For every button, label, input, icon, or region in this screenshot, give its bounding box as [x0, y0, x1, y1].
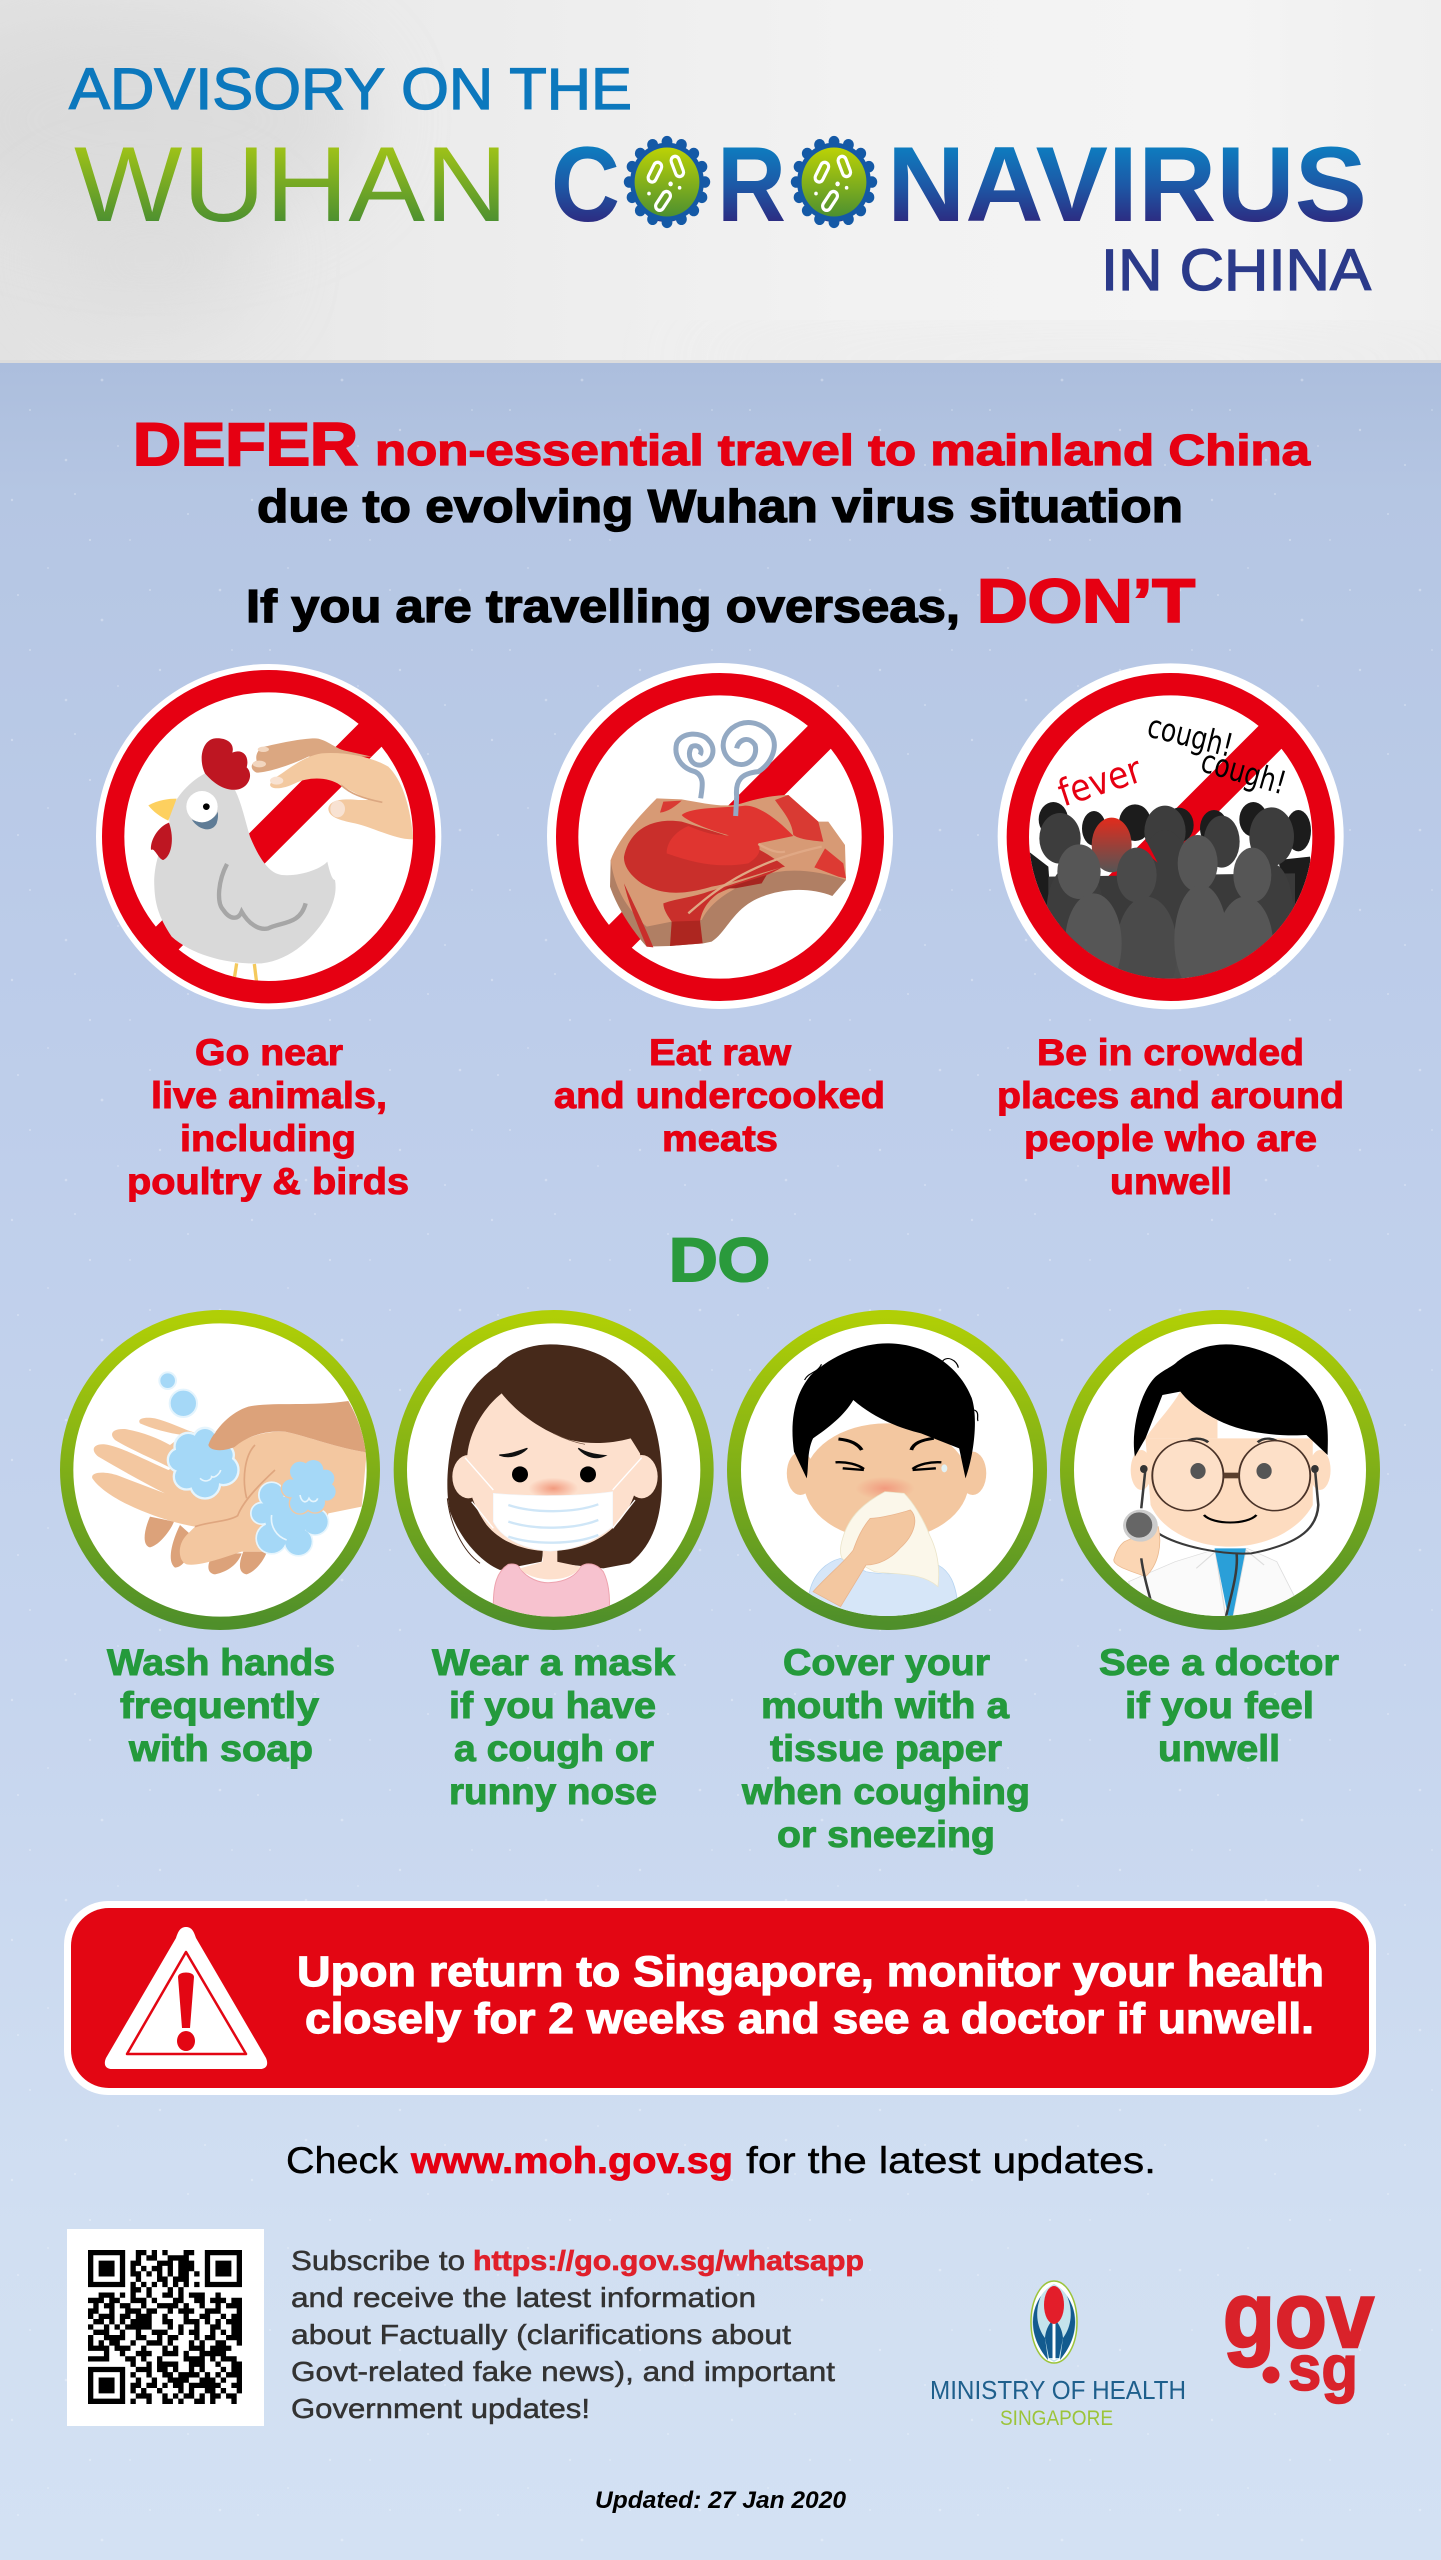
caption: cover your mouth: or sneezing	[777, 1814, 995, 1855]
text: subscribe	[291, 2245, 864, 2424]
caption: wear a mask: a cough or	[454, 1728, 654, 1769]
icon: virus one	[624, 136, 710, 228]
caption: wear a mask: Wear a mask	[432, 1642, 675, 1683]
logo: gov.sg: sg	[1288, 2332, 1358, 2404]
text: check website: Check	[286, 2140, 399, 2181]
caption: see a doctor: if you feel	[1125, 1685, 1314, 1726]
caption: raw meat: meats	[662, 1118, 778, 1159]
logo: gov.sg	[1223, 2262, 1374, 2404]
icon: moh emblem	[1031, 2281, 1077, 2363]
caption: raw meat	[554, 1032, 885, 1159]
caption: wear a mask	[432, 1642, 675, 1812]
icon: no crowded places: cough!	[1197, 742, 1291, 802]
caption: wear a mask: runny nose	[449, 1771, 657, 1812]
caption: crowded places: people who are	[1024, 1118, 1317, 1159]
callout text	[297, 1948, 1324, 2043]
text: check website: for the latest updates.	[746, 2140, 1156, 2181]
title: in china: IN CHINA	[1101, 238, 1371, 303]
heading: defer travel	[133, 411, 1311, 532]
text: subscribe: about Factually (clarifications about	[291, 2319, 791, 2350]
heading: don't	[246, 567, 1195, 635]
caption: crowded places: Be in crowded	[1037, 1032, 1304, 1073]
heading: don't: DON’T	[977, 567, 1195, 635]
text: check website	[286, 2140, 1156, 2181]
caption: raw meat: Eat raw	[649, 1032, 791, 1073]
caption: cover your mouth: when coughing	[741, 1771, 1030, 1812]
text: updated date: Updated: 27 Jan 2020	[595, 2487, 847, 2514]
title: coronavirus: R	[717, 124, 786, 244]
title: advisory on the: ADVISORY ON THE	[69, 57, 632, 122]
heading: don't: If you are travelling overseas,	[246, 580, 960, 632]
caption: live animals: including	[180, 1118, 356, 1159]
heading: defer travel: due to evolving Wuhan virus situation	[257, 480, 1183, 532]
caption: live animals: poultry & birds	[127, 1161, 409, 1202]
icon: see a doctor	[1067, 1317, 1373, 1625]
caption: live animals: Go near	[195, 1032, 343, 1073]
caption: cover your mouth: Cover your	[783, 1642, 990, 1683]
title: coronavirus: NAVIRUS	[887, 124, 1367, 244]
caption: wash hands: frequently	[120, 1685, 319, 1726]
icon: wash hands	[67, 1317, 373, 1623]
title: coronavirus: O	[632, 124, 700, 244]
icon: cover mouth	[734, 1317, 1040, 1625]
heading: do: DO	[669, 1226, 770, 1294]
caption: crowded places	[997, 1032, 1344, 1202]
text: subscribe: Subscribe to	[291, 2245, 465, 2276]
icon: no crowded places	[998, 663, 1344, 1009]
icon: no raw meat	[547, 663, 893, 1009]
callout text: Upon return to Singapore, monitor your health	[297, 1948, 1324, 1996]
caption: see a doctor	[1099, 1642, 1339, 1769]
caption: see a doctor: unwell	[1158, 1728, 1280, 1769]
logo: ministry of health: MINISTRY OF HEALTH	[930, 2375, 1186, 2405]
header panel	[0, 0, 1441, 380]
caption: cover your mouth: mouth with a	[761, 1685, 1009, 1726]
logo: gov.sg: gov	[1223, 2262, 1374, 2367]
icon: no live animals	[96, 664, 441, 1009]
icon: no crowded places: cough!	[1144, 707, 1237, 765]
heading: defer travel: non-essential travel to mainland China	[375, 426, 1311, 475]
logo: ministry of health	[930, 2281, 1186, 2430]
text: subscribe: Government updates!	[291, 2393, 590, 2424]
text: subscribe: Govt-related fake news), and important	[291, 2356, 835, 2387]
icon: wear a mask	[400, 1317, 707, 1625]
caption: crowded places: unwell	[1110, 1161, 1232, 1202]
text: check website: www.moh.gov.sg	[410, 2140, 733, 2181]
caption: cover your mouth: tissue paper	[770, 1728, 1002, 1769]
title: coronavirus: O	[800, 124, 868, 244]
title: coronavirus: C	[551, 124, 620, 244]
text: subscribe: and receive the latest information	[291, 2282, 756, 2313]
callout: monitor your health	[64, 1901, 1376, 2095]
caption: wash hands: with soap	[128, 1728, 313, 1769]
callout text: closely for 2 weeks and see a doctor if unwell.	[305, 1995, 1314, 2043]
caption: wear a mask: if you have	[449, 1685, 656, 1726]
text: subscribe: https://go.gov.sg/whatsapp	[473, 2245, 864, 2276]
qr code	[67, 2229, 264, 2426]
icon: warning triangle	[105, 1927, 267, 2069]
heading: defer travel: DEFER	[133, 411, 358, 478]
logo: ministry of health: SINGAPORE	[1000, 2407, 1113, 2430]
icon: no crowded places: fever	[1053, 747, 1147, 815]
caption: live animals	[127, 1032, 409, 1202]
caption: wash hands	[107, 1642, 335, 1769]
caption: cover your mouth	[741, 1642, 1030, 1855]
icon: virus two	[791, 136, 877, 228]
caption: see a doctor: See a doctor	[1099, 1642, 1339, 1683]
logo: gov.sg: .	[1263, 2328, 1280, 2395]
caption: wash hands: Wash hands	[107, 1642, 335, 1683]
caption: live animals: live animals,	[151, 1075, 387, 1116]
caption: raw meat: and undercooked	[554, 1075, 885, 1116]
title: coronavirus	[551, 124, 1367, 244]
title: wuhan: WUHAN	[74, 124, 508, 244]
caption: crowded places: places and around	[997, 1075, 1344, 1116]
